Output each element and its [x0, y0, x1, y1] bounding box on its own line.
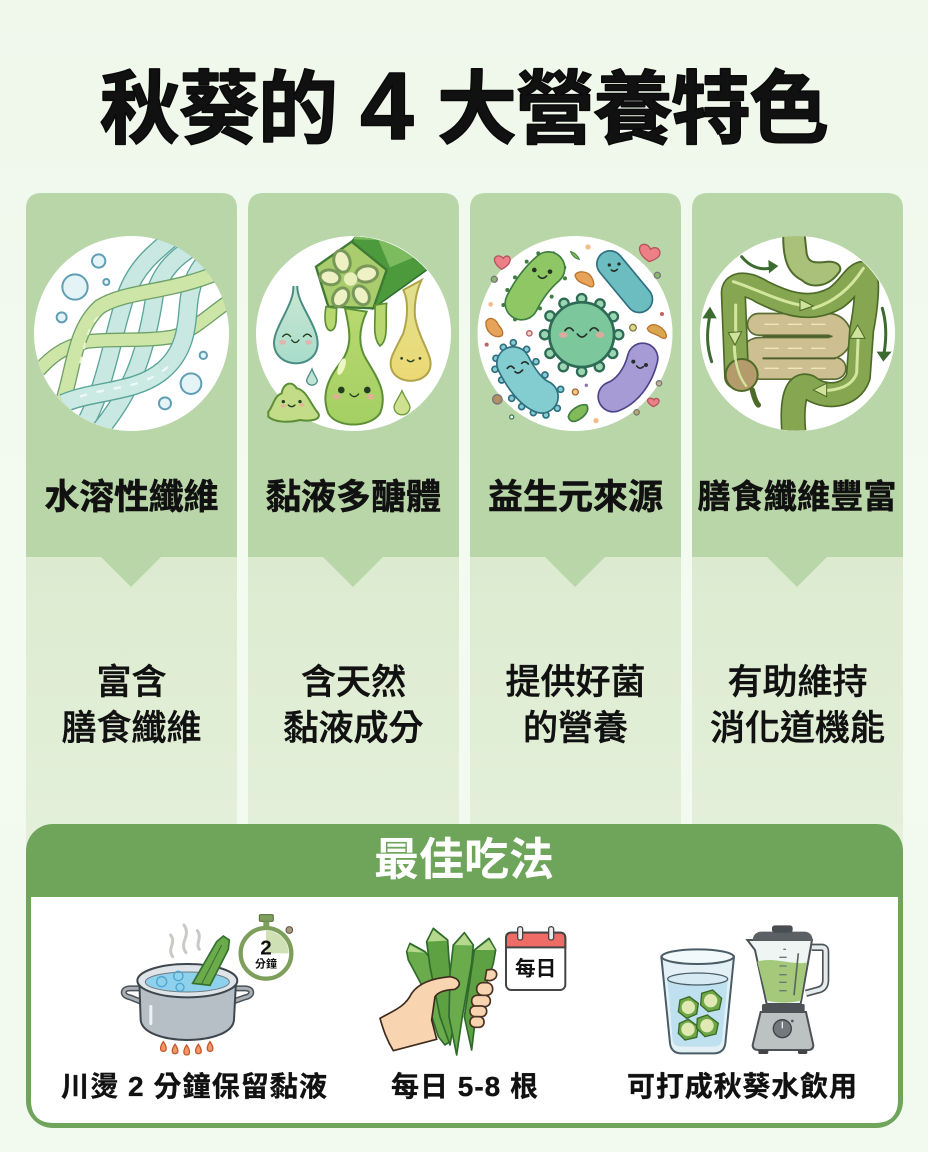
- icon: digestive tract: [702, 232, 892, 443]
- title: [100, 53, 829, 160]
- description: 消化道機能: [710, 709, 885, 748]
- description: 的營養: [523, 709, 628, 748]
- icon: okra mucilage drops: [268, 232, 440, 425]
- description: [710, 663, 885, 748]
- description: 提供好菌: [505, 663, 646, 702]
- description: [505, 663, 646, 748]
- icon: soluble fibre strands: [33, 237, 233, 430]
- heading: 黏液多醣體: [266, 478, 441, 517]
- heading: 水溶性纖維: [44, 478, 218, 517]
- title: 4: [360, 53, 414, 160]
- panel: 益生元來源: [470, 193, 681, 847]
- description: [61, 663, 202, 748]
- heading: 益生元來源: [488, 478, 663, 517]
- label: 每日 5-8 根: [391, 1071, 538, 1102]
- panel: 膳食纖維豐富: [692, 193, 903, 847]
- heading: 最佳吃法: [374, 834, 554, 885]
- icon: hand holding okra with calendar: 每日: [515, 958, 556, 981]
- icon: boiling pot with stopwatch: 2: [260, 936, 272, 959]
- icon: okra water and blender: [661, 925, 826, 1054]
- icon: hand holding okra with calendar: [380, 927, 565, 1055]
- icon: boiling pot with stopwatch: [124, 915, 293, 1055]
- label: 可打成秋葵水飲用: [627, 1071, 857, 1102]
- description: 膳食纖維: [61, 709, 202, 748]
- panel: 最佳吃法: [26, 824, 903, 1128]
- description: [283, 663, 424, 748]
- title: 秋葵的: [100, 65, 338, 154]
- title: 大營養特色: [437, 65, 829, 154]
- heading: 膳食纖維豐富: [698, 478, 896, 515]
- panel: 黏液多醣體: [248, 193, 459, 847]
- icon: boiling pot with stopwatch: 分鐘: [255, 956, 277, 970]
- description: 含天然: [301, 663, 406, 702]
- description: 有助維持: [727, 663, 868, 702]
- description: 黏液成分: [283, 709, 424, 748]
- panel: 水溶性纖維: [26, 193, 237, 847]
- icon: friendly bacteria: [485, 244, 666, 423]
- label: 川燙 2 分鐘保留黏液: [61, 1071, 327, 1102]
- description: 富含: [96, 663, 167, 702]
